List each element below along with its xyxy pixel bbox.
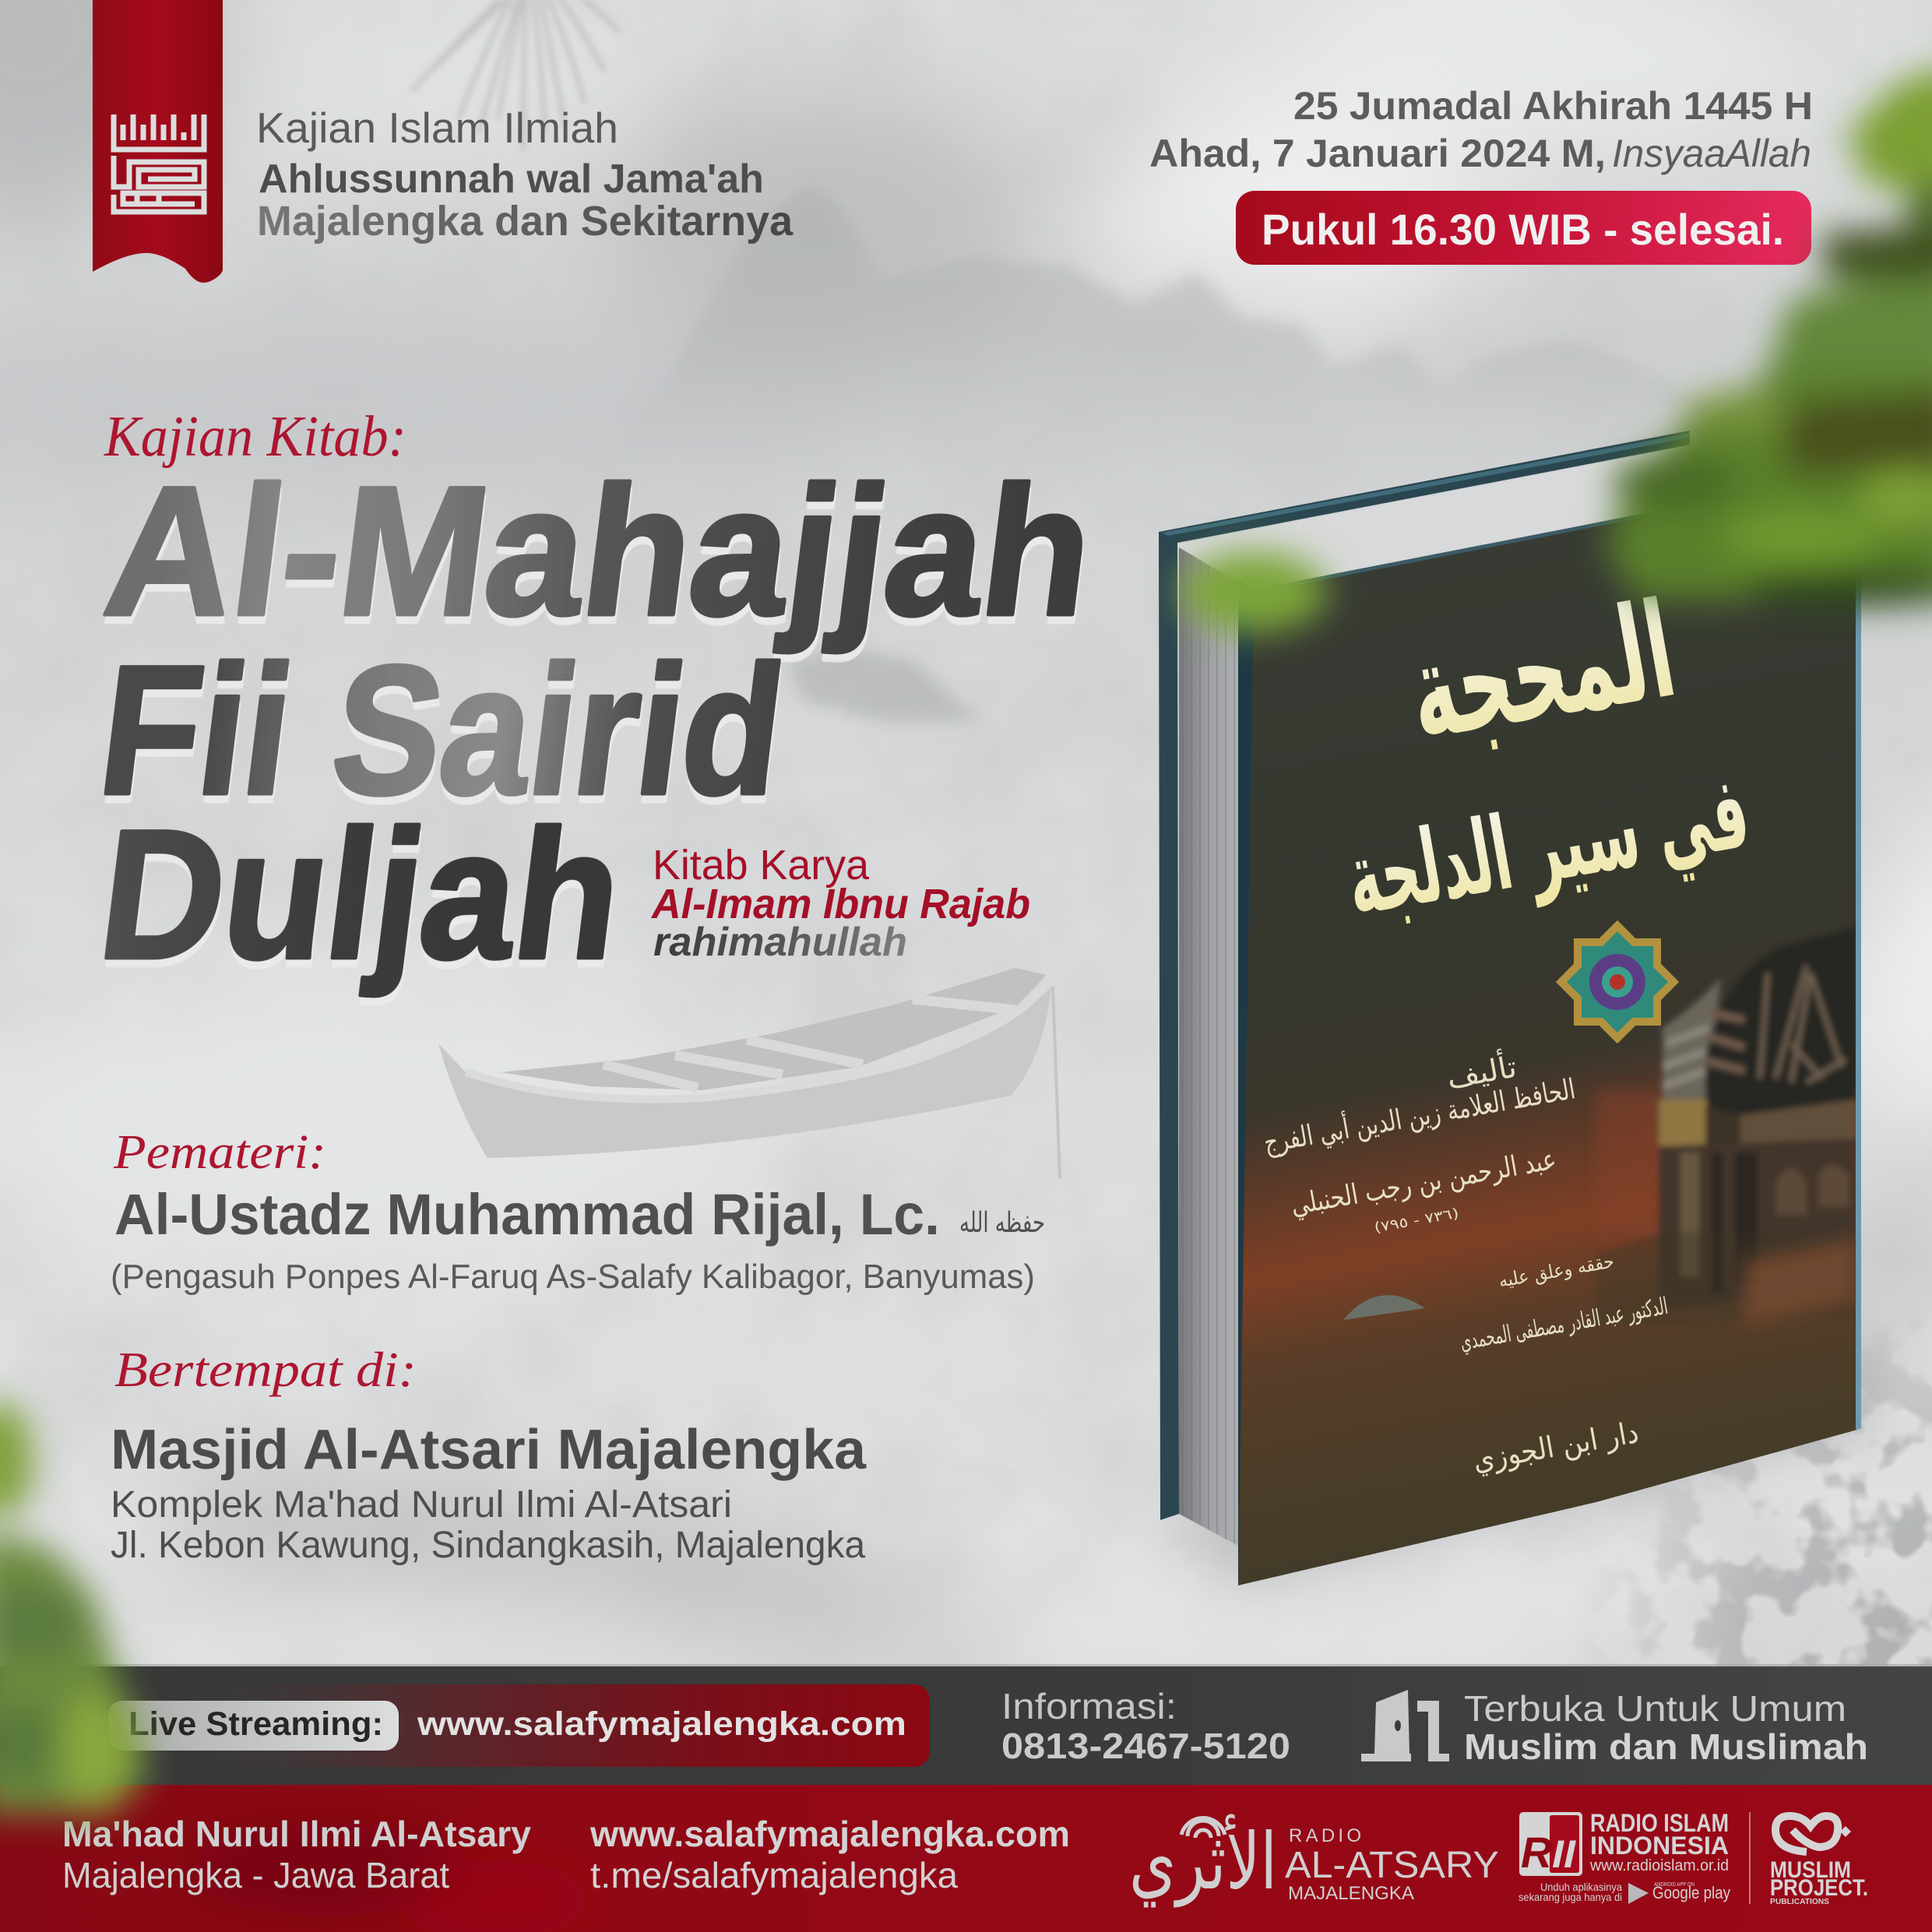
main title: Duljah xyxy=(90,793,632,998)
palm fronds xyxy=(413,0,619,148)
contact info: 0813-2467-5120 xyxy=(1001,1726,1290,1766)
cover xyxy=(1238,475,1860,1585)
speaker: Al-Ustadz Muhammad Rijal, Lc. xyxy=(114,1182,940,1247)
logo: radio al-atsary xyxy=(1129,1814,1499,1907)
icon: open door xyxy=(1361,1690,1449,1761)
page top xyxy=(1174,436,1869,593)
open to public xyxy=(1464,1688,1868,1767)
contact info xyxy=(1001,1686,1290,1766)
speaker xyxy=(111,1182,1045,1296)
organiser heading: Majalengka dan Sekitarnya xyxy=(257,198,794,245)
footer band xyxy=(0,1785,1932,1932)
logo: radio islam indonesia: Google play xyxy=(1652,1883,1730,1902)
mosque arch xyxy=(1596,927,1857,1324)
open to public: Muslim dan Muslimah xyxy=(1464,1726,1868,1767)
info band xyxy=(0,1664,1932,1785)
arabic book title: المحجة xyxy=(1398,573,1686,771)
venue: Komplek Ma'had Nurul Ilmi Al-Atsari xyxy=(111,1484,732,1526)
date and time: 25 Jumadal Akhirah 1445 H xyxy=(1293,84,1813,128)
arabic author lines: الدكتور عبد القادر مصطفى المحمدي xyxy=(1458,1293,1670,1356)
ribbon with kufic basmala xyxy=(93,0,223,283)
speaker: (Pengasuh Ponpes Al-Faruq As-Salafy Kalibagor, Banyumas) xyxy=(111,1258,1035,1296)
main title: Fii Sairid xyxy=(90,628,794,833)
main title: Al-Mahajjah xyxy=(96,449,1103,654)
arabic author lines: دار ابن الجوزي xyxy=(1470,1415,1642,1479)
misty island xyxy=(788,646,981,720)
footer address: Majalengka - Jawa Barat xyxy=(62,1855,449,1895)
pemateri label: Pemateri: xyxy=(113,1126,326,1179)
time pill: Pukul 16.30 WIB - selesai. xyxy=(1262,205,1784,254)
venue label: Bertempat di: xyxy=(114,1342,417,1397)
logo divider xyxy=(1749,1812,1751,1904)
book author: Al-Imam Ibnu Rajab xyxy=(650,881,1030,927)
book author: rahimahullah xyxy=(653,920,907,965)
contact info: Informasi: xyxy=(1001,1686,1177,1726)
book mockup xyxy=(1159,431,1884,1589)
logo: radio al-atsary: AL-ATSARY xyxy=(1285,1845,1499,1886)
book author: Kitab Karya xyxy=(653,842,870,889)
foliage: center leaf xyxy=(1180,551,1328,632)
organiser heading: Kajian Islam Ilmiah xyxy=(256,104,618,152)
kajian kitab label: Kajian Kitab: xyxy=(104,405,406,469)
arabic author lines: حققه وعلق عليه xyxy=(1497,1250,1616,1292)
bottom-right mottled floral shadow xyxy=(1573,1277,1932,1666)
footer links xyxy=(589,1814,1070,1895)
arabic author lines: (٧٣٦ - ٧٩٥) xyxy=(1373,1205,1460,1236)
logo: radio al-atsary: RADIO xyxy=(1289,1825,1361,1846)
speaker: حفظه الله xyxy=(959,1207,1045,1239)
arabic author lines xyxy=(1261,1047,1670,1479)
footer address: Ma'had Nurul Ilmi Al-Atsary xyxy=(62,1814,531,1854)
logo: radio islam indonesia: RADIO ISLAM xyxy=(1590,1809,1729,1837)
time pill xyxy=(1236,191,1811,265)
foliage: top right xyxy=(1604,62,1932,607)
footer links: www.salafymajalengka.com xyxy=(589,1814,1070,1854)
arabic author lines: الحافظ العلامة زين الدين أبي الفرج xyxy=(1261,1070,1578,1160)
footer links: t.me/salafymajalengka xyxy=(590,1855,958,1895)
logo: radio islam indonesia: R xyxy=(1521,1828,1553,1877)
logo: muslim project xyxy=(1770,1816,1868,1906)
arabic book title xyxy=(1338,573,1758,940)
venue xyxy=(111,1419,867,1566)
date and time: InsyaaAllah xyxy=(1612,132,1811,175)
logo: muslim project: PROJECT. xyxy=(1770,1875,1868,1901)
venue: Masjid Al-Atsari Majalengka xyxy=(111,1419,867,1481)
boat illustration xyxy=(438,968,1060,1178)
logo: radio islam indonesia: INDONESIA xyxy=(1590,1832,1729,1860)
back cover edge xyxy=(1159,431,1690,1520)
logo: radio islam indonesia: Unduh aplikasinya xyxy=(1540,1881,1622,1893)
logo: radio al-atsary: الأثري xyxy=(1129,1814,1277,1907)
date and time: Ahad, 7 Januari 2024 M, xyxy=(1149,132,1606,175)
front top edge xyxy=(1254,471,1860,596)
organiser heading xyxy=(256,104,794,245)
arabic author lines: تأليف xyxy=(1444,1047,1519,1096)
open to public: Terbuka Untuk Umum xyxy=(1464,1688,1846,1729)
logo: radio islam indonesia: II xyxy=(1552,1832,1576,1876)
streaming pill xyxy=(108,1684,930,1767)
faint mountains xyxy=(561,183,1760,514)
logo: radio islam indonesia: sekarang juga hanya di xyxy=(1519,1891,1622,1903)
arabic author lines: عبد الرحمن بن رجب الحنبلي xyxy=(1289,1144,1558,1222)
logo: muslim project: PUBLICATIONS xyxy=(1770,1898,1829,1906)
page block xyxy=(1179,547,1238,1546)
foliage: bottom left xyxy=(0,1402,148,1814)
book shadow xyxy=(1168,1324,1884,1589)
book author xyxy=(650,842,1030,965)
streaming pill: www.salafymajalengka.com xyxy=(417,1705,906,1743)
kufic calligraphy xyxy=(114,114,204,212)
logo: radio islam indonesia: www.radioislam.or.id xyxy=(1589,1857,1729,1874)
logo: radio islam indonesia: ANDROID APP ON xyxy=(1654,1882,1694,1888)
organiser heading: Ahlussunnah wal Jama'ah xyxy=(259,157,764,202)
footer address xyxy=(62,1814,531,1895)
main title xyxy=(90,449,1103,998)
ornamental star xyxy=(1556,920,1679,1043)
logo: radio al-atsary: MAJALENGKA xyxy=(1288,1883,1414,1904)
sun xyxy=(1343,1295,1425,1320)
logo: muslim project: MUSLIM xyxy=(1770,1857,1851,1883)
streaming pill: Live Streaming: xyxy=(128,1705,383,1743)
date and time xyxy=(1149,84,1813,265)
cover right edge xyxy=(1856,498,1861,1430)
venue: Jl. Kebon Kawung, Sindangkasih, Majalengka xyxy=(111,1525,865,1566)
wifi arcs xyxy=(1181,1818,1225,1838)
front spine strip xyxy=(1238,580,1255,1585)
logo: radio islam indonesia xyxy=(1519,1809,1730,1904)
